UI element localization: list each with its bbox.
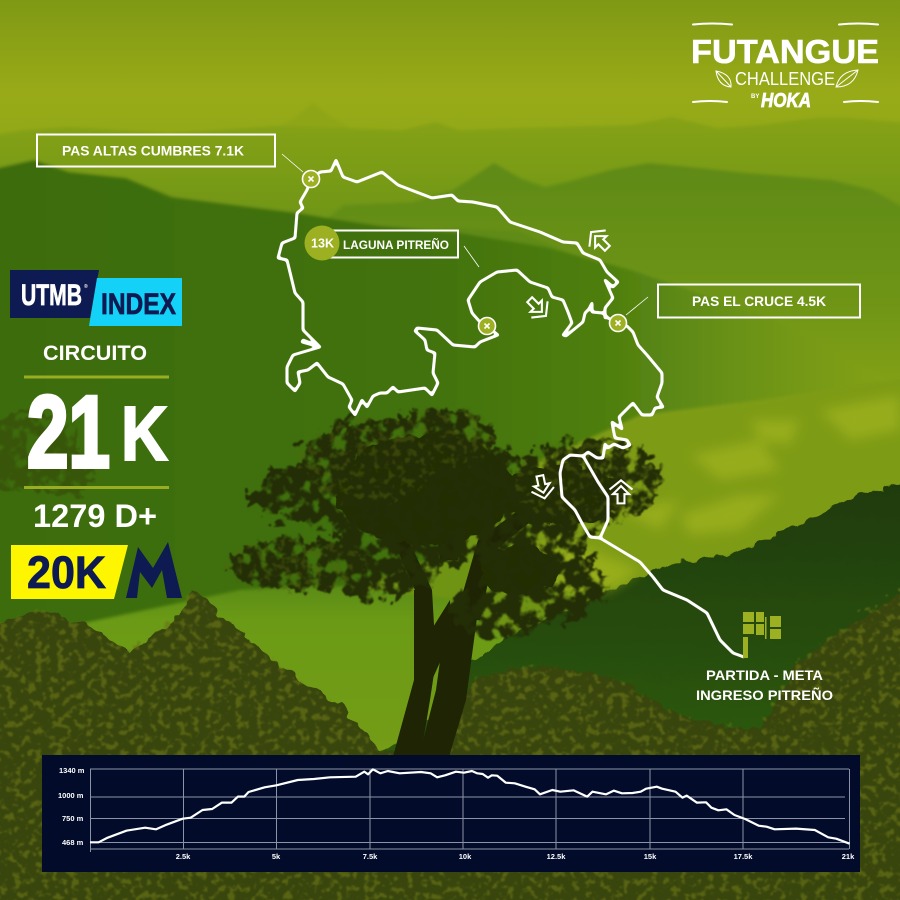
text: elevation gain: 1279 D+	[33, 498, 157, 534]
badge: UTMB Index	[10, 270, 182, 326]
chart: x axis labels: 2.5k	[176, 852, 191, 861]
chart: x axis labels: 21k	[842, 852, 855, 861]
chart: x axis labels: 5k	[272, 852, 281, 861]
logo: Futangue Challenge by Hoka: HOKA	[761, 90, 811, 112]
chart: y axis labels: 750 m	[62, 814, 84, 823]
badge: 20K M	[11, 542, 182, 599]
background: lit valley fields	[520, 375, 900, 590]
background: foreground trees	[0, 408, 900, 900]
central tree trunks	[380, 470, 570, 760]
logo: Futangue Challenge by Hoka: CHALLENGE	[735, 69, 835, 89]
background: dark forested ridge	[373, 476, 900, 770]
badge: UTMB Index: ®	[84, 283, 88, 290]
direction arrow: north-west	[583, 224, 615, 256]
direction arrow: north	[610, 480, 632, 503]
route map	[278, 160, 744, 657]
icon: right leaf	[836, 70, 858, 87]
marker: Pas El Cruce	[610, 314, 626, 332]
chart: y axis labels	[58, 766, 85, 847]
logo: Futangue Challenge by Hoka	[691, 24, 879, 112]
chart: x axis labels: 15k	[644, 852, 657, 861]
icon: start-finish flag	[743, 612, 781, 658]
chart: x axis labels: 10k	[459, 852, 472, 861]
chart grid	[90, 769, 850, 852]
marker: Laguna Pitreño	[478, 318, 496, 334]
route line	[278, 160, 744, 657]
chart: x axis labels: 17.5k	[734, 852, 753, 861]
badge: 20K M: 20K	[27, 547, 106, 598]
direction arrow: south	[529, 473, 556, 501]
callout: Pas El Cruce: PAS EL CRUCE 4.5K	[692, 293, 826, 309]
callout: Laguna Pitreño: LAGUNA PITREÑO	[343, 239, 449, 252]
text: distance 21K: 21	[27, 375, 110, 489]
callout: Laguna Pitreño: 13K	[311, 236, 335, 250]
chart: y axis labels: 1340 m	[59, 766, 85, 775]
chart: y axis labels: 1000 m	[58, 791, 84, 800]
chart: elevation line	[90, 769, 850, 844]
logo: Futangue Challenge by Hoka: FUTANGUE	[691, 33, 879, 70]
icon: left leaf	[716, 71, 731, 87]
text: start-finish label	[696, 667, 833, 703]
text: circuito: CIRCUITO	[43, 342, 147, 365]
callout: Pas Altas Cumbres: PAS ALTAS CUMBRES 7.1K	[62, 142, 244, 158]
central tree canopy	[335, 435, 620, 595]
direction arrow: south-east	[522, 292, 554, 324]
badge: UTMB Index: INDEX	[101, 288, 176, 321]
callout: Laguna Pitreño	[304, 226, 479, 267]
chart: y axis labels: 468 m	[62, 838, 84, 847]
chart: x axis labels: 12.5k	[547, 852, 566, 861]
marker: Pas Altas Cumbres	[302, 170, 320, 188]
panel: elevation profile	[42, 755, 860, 872]
callout: Pas El Cruce	[626, 284, 860, 318]
chart: x axis labels: 7.5k	[363, 852, 378, 861]
text: start-finish label: PARTIDA - META	[706, 667, 823, 683]
callout: Pas Altas Cumbres	[37, 134, 303, 172]
left edge branch	[0, 412, 95, 496]
icon: M logo	[126, 542, 182, 598]
text: distance 21K: K	[121, 391, 168, 477]
badge: UTMB Index: UTMB	[21, 279, 82, 312]
logo: Futangue Challenge by Hoka: BY	[751, 94, 759, 100]
text: start-finish label: INGRESO PITREÑO	[696, 686, 833, 703]
chart: x axis labels	[176, 852, 855, 861]
